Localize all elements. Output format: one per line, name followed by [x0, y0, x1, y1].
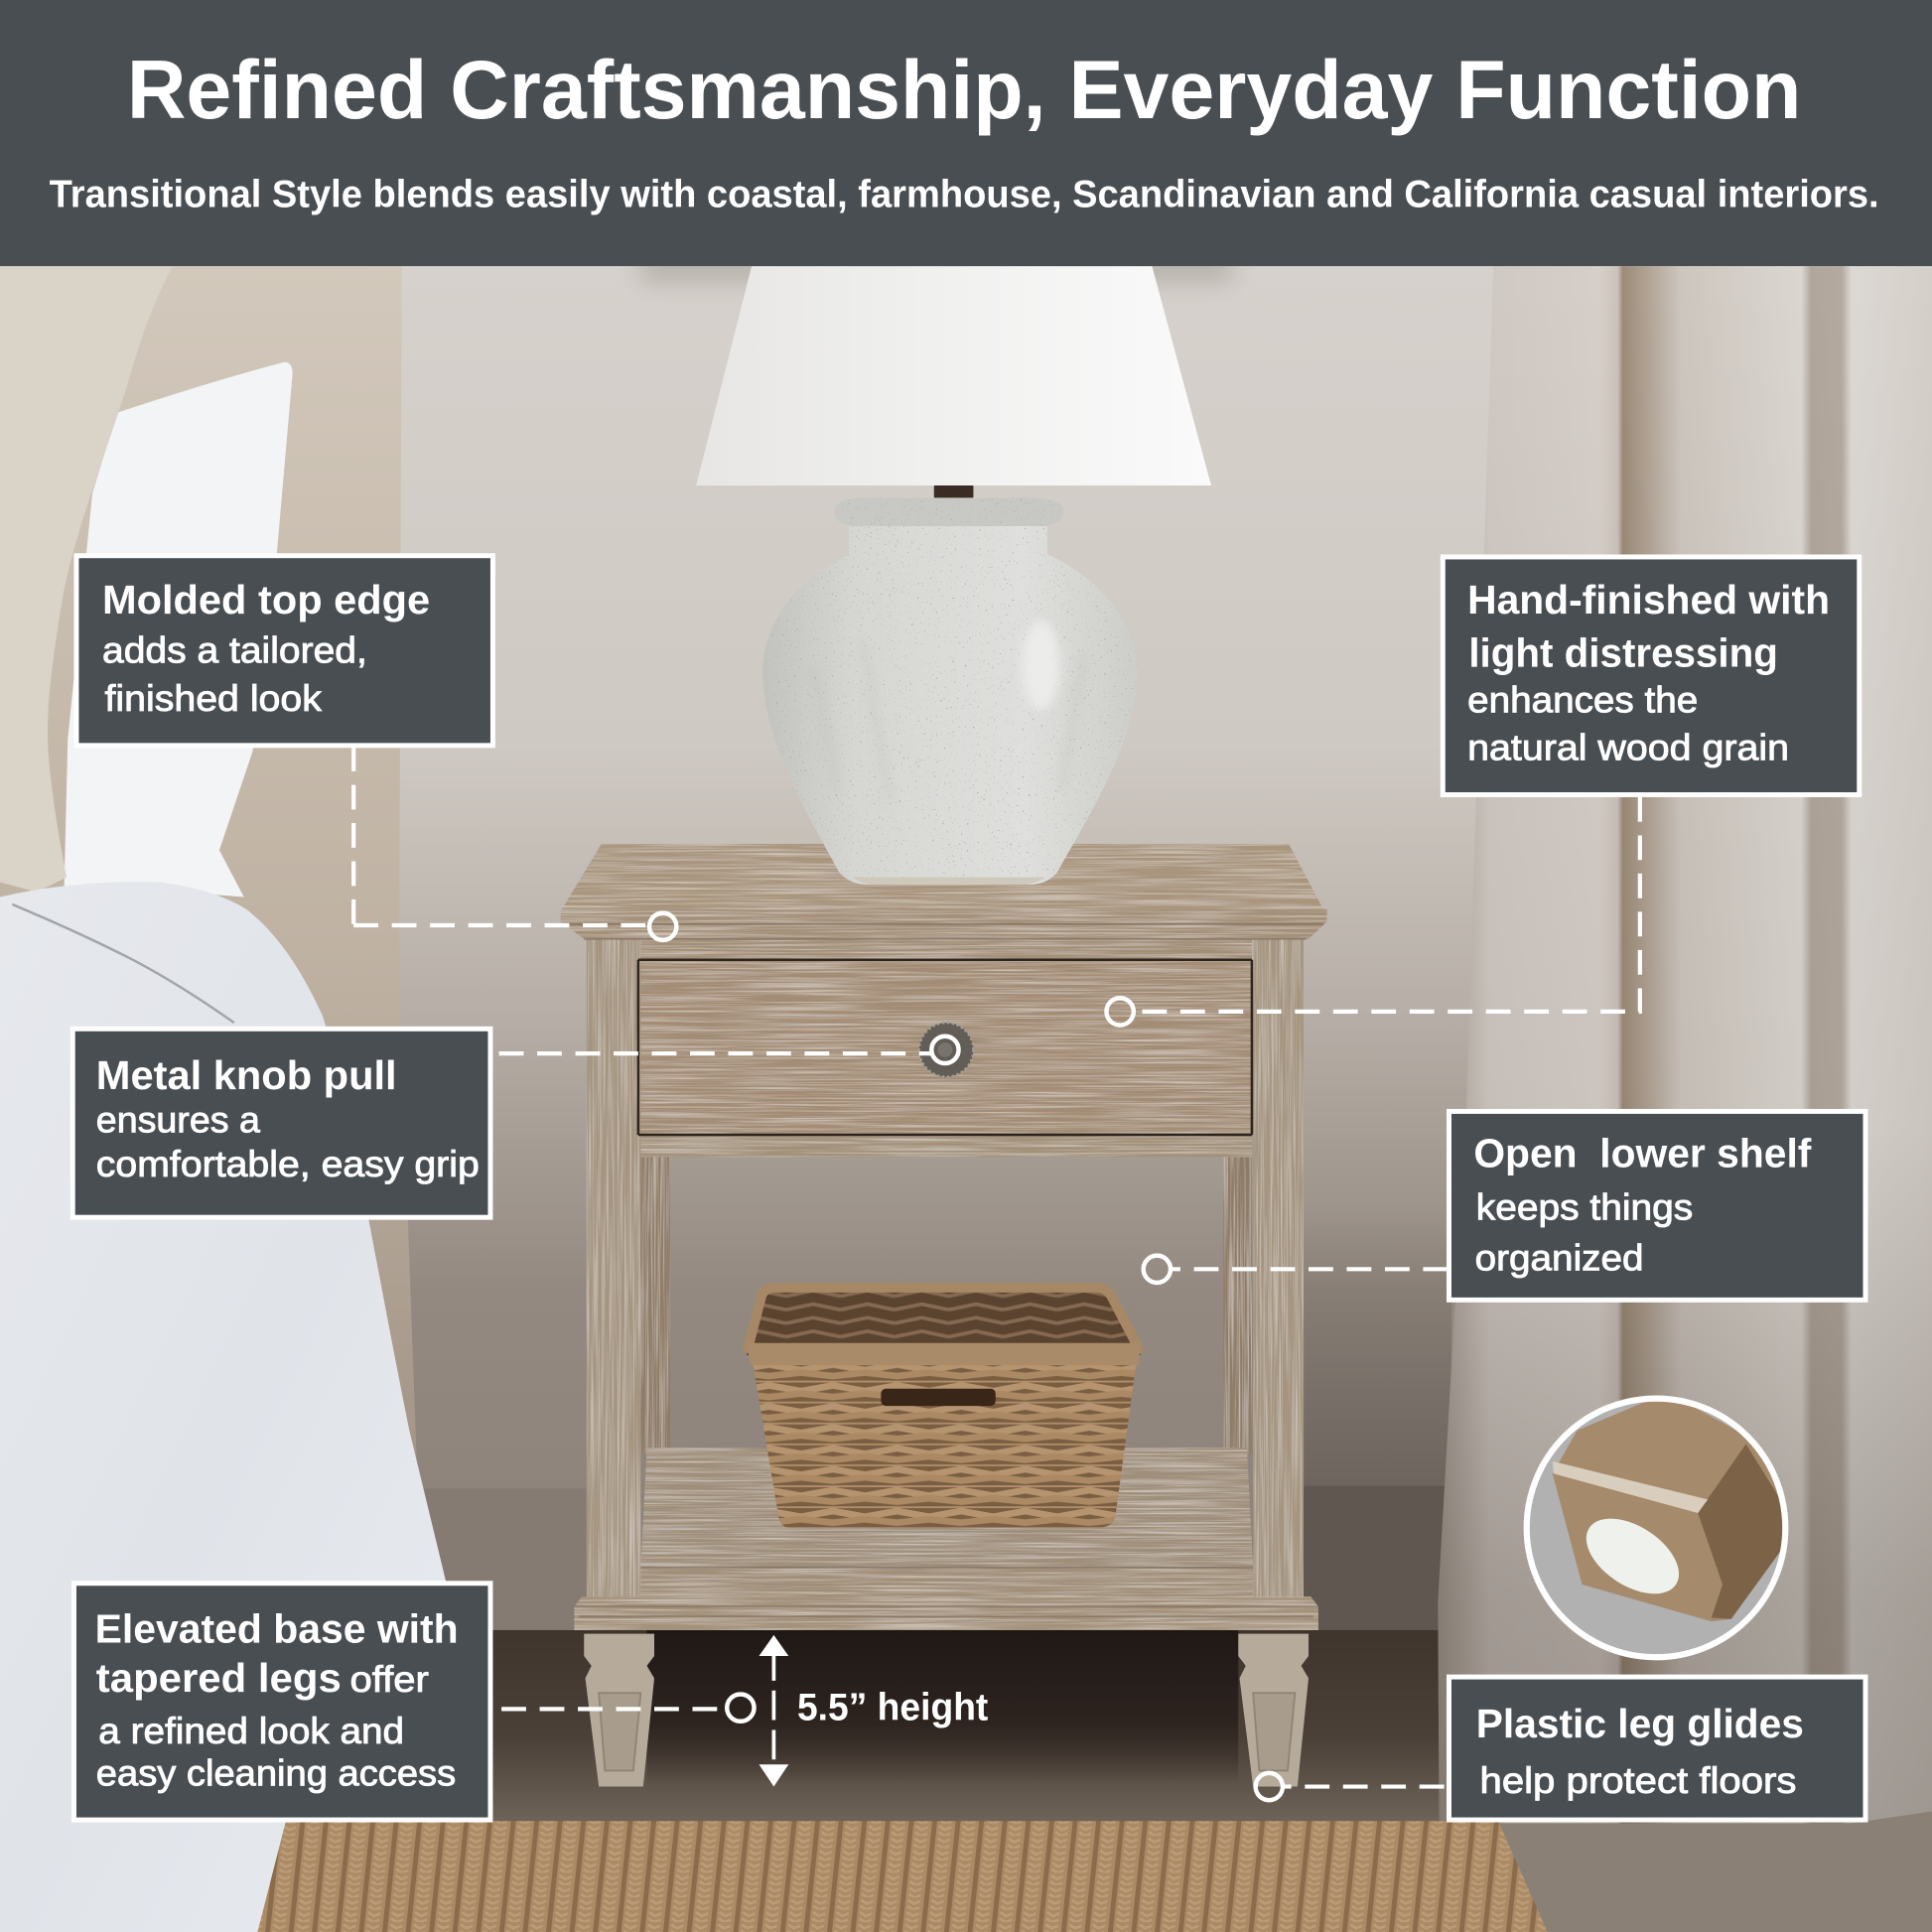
nightstand — [561, 844, 1327, 1787]
callout: elevated base: offer — [349, 1658, 429, 1700]
callout: open lower shelf: Open lower shelf — [1473, 1130, 1812, 1175]
duvet stitching — [12, 904, 234, 1023]
height label: 5.5” height — [797, 1687, 989, 1729]
knob face — [937, 1042, 952, 1057]
basket — [747, 1288, 1141, 1528]
basket handle — [881, 1389, 996, 1406]
lamp — [696, 266, 1211, 885]
marker dots — [649, 913, 1283, 1800]
pale stripe — [1553, 1461, 1708, 1513]
floor — [469, 1630, 1932, 1824]
headboard — [0, 266, 419, 1626]
shadow under table — [647, 1630, 1238, 1784]
base molding — [574, 1596, 1318, 1630]
lower rail — [640, 1136, 1252, 1157]
back legs — [640, 1156, 1252, 1453]
callout: elevated base — [73, 1584, 490, 1820]
leader: plastic glides — [1283, 1785, 1445, 1788]
height arrow — [759, 1635, 788, 1787]
callout: elevated base: tapered legs — [96, 1655, 342, 1701]
inset background — [1527, 1399, 1785, 1657]
front posts — [587, 939, 1304, 1596]
callout: hand-finished: light distressing — [1468, 629, 1778, 675]
callout: molded top edge — [76, 556, 492, 746]
title: Refined Craftsmanship, Everyday Function — [127, 44, 1801, 136]
jute rug — [257, 1821, 1548, 1932]
knob rim — [919, 1023, 973, 1077]
upper apron — [638, 939, 1252, 959]
leader: elevated base — [501, 1708, 727, 1711]
callout: elevated base: Elevated base with — [95, 1605, 459, 1651]
callout: metal knob pull: comfortable, easy grip — [96, 1143, 480, 1184]
callout: hand-finished — [1443, 557, 1860, 794]
top edge molding — [561, 909, 1327, 939]
callout: hand-finished: Hand-finished with — [1467, 577, 1830, 622]
callout: plastic leg glides — [1449, 1677, 1865, 1820]
callout: molded top edge: adds a tailored, — [102, 629, 367, 671]
callout: metal knob pull: ensures a — [96, 1099, 260, 1141]
callout: hand-finished: natural wood grain — [1467, 727, 1789, 768]
shelf — [640, 1448, 1253, 1568]
vase drips — [813, 640, 1084, 801]
knob pull — [919, 1023, 973, 1077]
ceramic vase — [762, 526, 1138, 885]
callout: open lower shelf: organized — [1475, 1237, 1644, 1279]
right baseboard — [1294, 1486, 1453, 1631]
callout: open lower shelf — [1449, 1111, 1865, 1300]
curtains — [1438, 266, 1932, 1824]
basket interior — [747, 1289, 1141, 1355]
curtain lower shading — [1438, 266, 1932, 1824]
leader: metal knob — [499, 1051, 931, 1055]
header band — [0, 0, 1932, 266]
callout: molded top edge: Molded top edge — [102, 577, 430, 622]
vase lip — [834, 497, 1063, 526]
drawer front — [638, 961, 1252, 1134]
duvet — [0, 882, 492, 1932]
beige pillow — [0, 266, 173, 893]
vase base — [853, 878, 1044, 885]
white glide — [1587, 1519, 1680, 1594]
leg bottom — [1553, 1392, 1787, 1621]
leader: hand finished — [1134, 797, 1640, 1012]
wall darkening right of the table — [1304, 1207, 1451, 1491]
leader: molded top edge — [353, 747, 649, 926]
inset ring — [1527, 1399, 1785, 1657]
leader: open shelf — [1171, 1268, 1448, 1271]
lower apron — [640, 1568, 1253, 1596]
lamp shade — [696, 266, 1211, 485]
vase glare — [1023, 621, 1059, 710]
callout: elevated base: easy cleaning access — [96, 1751, 456, 1793]
white pillow — [65, 362, 293, 897]
curtain folds — [1438, 266, 1932, 1824]
callout: plastic leg glides: Plastic leg glides — [1476, 1701, 1804, 1746]
callout: hand-finished: enhances the — [1467, 678, 1698, 720]
subtitle: Transitional Style blends easily with coastal, farmhouse, Scandinavian and California casual interiors. — [50, 173, 1879, 215]
header — [0, 0, 1932, 266]
callout: open lower shelf: keeps things — [1476, 1186, 1693, 1228]
basket body — [752, 1355, 1138, 1528]
molding shadow lines — [564, 924, 1323, 1616]
callout: metal knob pull: Metal knob pull — [96, 1052, 397, 1098]
leg side face — [1698, 1445, 1787, 1619]
leg glide inset circle — [1527, 1392, 1787, 1657]
callout: plastic leg glides: help protect floors — [1480, 1759, 1796, 1801]
lamp stem — [934, 484, 973, 499]
callout: metal knob pull — [72, 1029, 490, 1217]
basket rim front — [747, 1343, 1141, 1365]
right floor planks — [1417, 1811, 1932, 1932]
left baseboard — [407, 1488, 592, 1631]
lamp shadow on wall — [640, 254, 1232, 281]
callout: molded top edge: finished look — [104, 677, 322, 719]
tabletop — [562, 844, 1323, 909]
callout: elevated base: a refined look and — [98, 1710, 404, 1751]
drawer shadow lines — [638, 960, 1252, 1135]
wall — [369, 266, 1503, 1634]
basket rim back — [747, 1288, 1141, 1353]
right foot — [1238, 1634, 1309, 1787]
left foot — [584, 1634, 654, 1787]
wood horizontal parts — [561, 844, 1327, 1630]
